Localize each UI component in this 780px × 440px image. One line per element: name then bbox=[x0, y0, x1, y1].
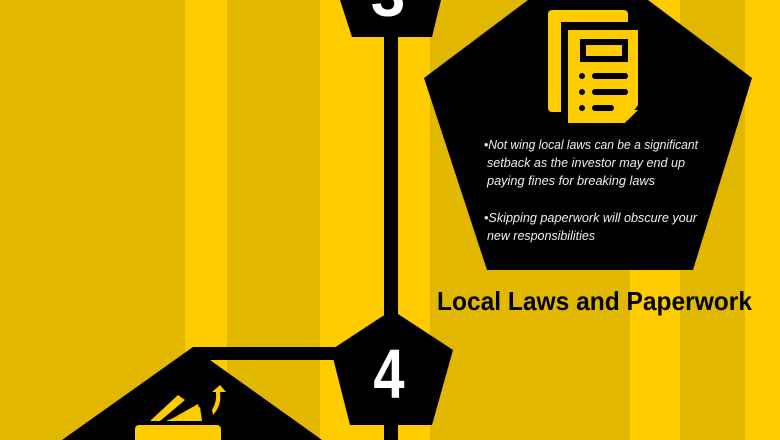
icon: wallet with cards bbox=[135, 385, 226, 440]
text block: bullets bbox=[484, 137, 699, 243]
text block: bullets: •Skipping paperwork will obscure your bbox=[484, 210, 698, 225]
step 3 pentagon badge bbox=[340, 0, 441, 37]
text block: bullets: •Not wing local laws can be a significant bbox=[484, 137, 699, 152]
panel: step 4 left pentagon bbox=[62, 347, 322, 440]
step 4 pentagon badge: 4 bbox=[373, 336, 405, 413]
icon: documents bbox=[548, 10, 645, 130]
text block: bullets: setback as the investor may end up bbox=[487, 155, 685, 170]
panel: local laws pentagon bbox=[424, 0, 752, 270]
step 4 pentagon badge bbox=[331, 310, 453, 425]
heading: Local Laws and Paperwork: Local Laws and Paperwork bbox=[437, 286, 753, 316]
text block: bullets: paying fines for breaking laws bbox=[486, 173, 655, 188]
connector line to step 4 panel bbox=[193, 347, 343, 360]
timeline vertical line bbox=[384, 0, 398, 440]
text block: bullets: new responsibilities bbox=[487, 228, 595, 243]
